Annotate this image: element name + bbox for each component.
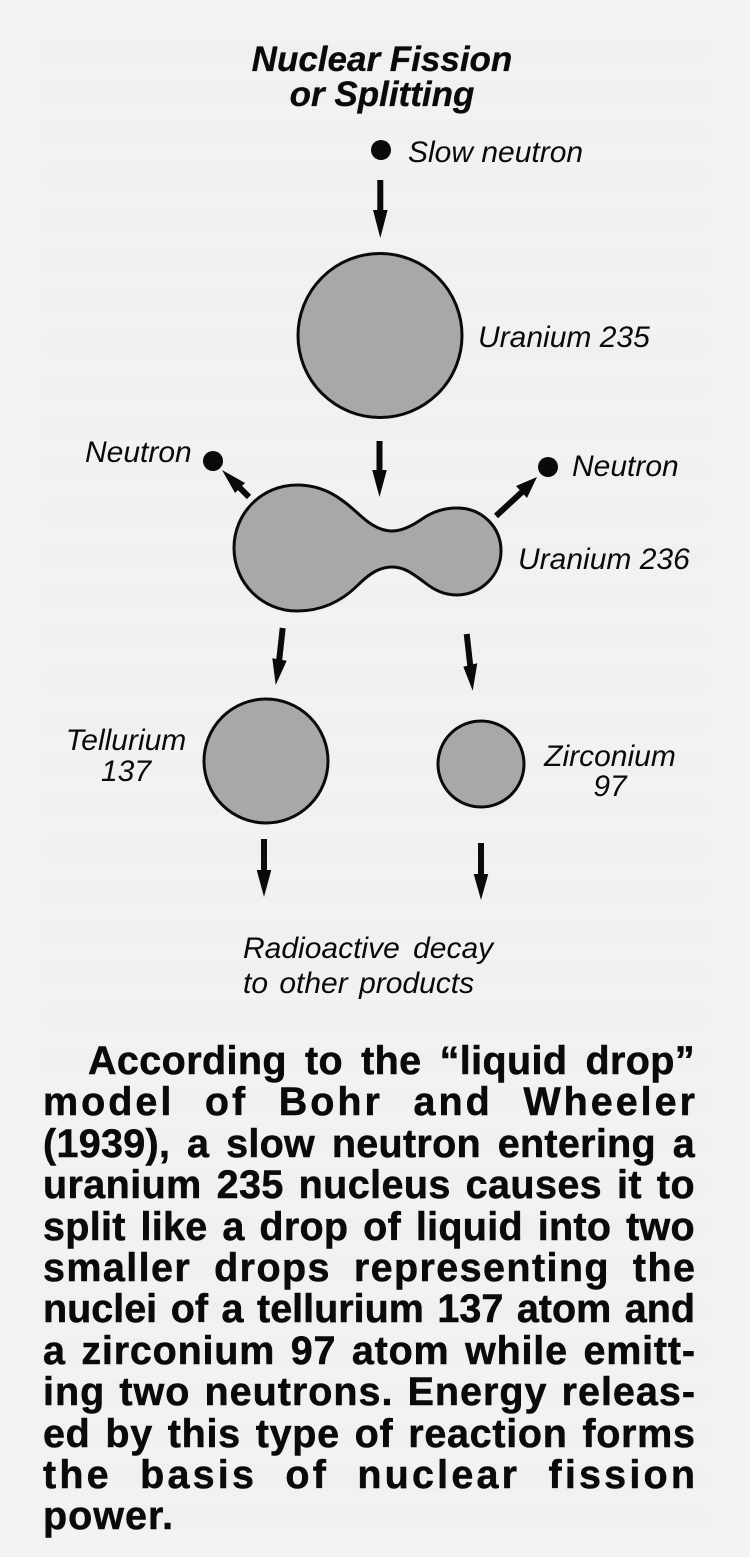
caption text: a zirconium 97 atom while emitt-	[43, 1329, 696, 1373]
arrow: to tellurium	[272, 628, 287, 685]
title	[252, 40, 512, 114]
label: tellurium 137: Tellurium	[66, 724, 186, 757]
caption text: (1939), a slow neutron entering a	[43, 1122, 695, 1166]
title: or Splitting	[290, 75, 474, 114]
caption text: ed by this type of reaction forms	[43, 1412, 696, 1456]
label: left neutron: Neutron	[85, 436, 192, 469]
caption text	[43, 1039, 698, 1538]
label: zirconium 97: 97	[593, 770, 627, 803]
caption text: power.	[43, 1494, 174, 1538]
tellurium 137 nucleus	[204, 699, 328, 823]
caption text: ing two neutrons. Energy releas-	[43, 1370, 696, 1414]
arrow: left neutron	[222, 470, 249, 497]
label: uranium 236: Uranium 236	[518, 543, 690, 576]
diagram: fission	[202, 140, 558, 900]
icon: left neutron	[203, 451, 223, 471]
uranium 236 drop	[234, 485, 501, 611]
caption text: model of Bohr and Wheeler	[43, 1080, 698, 1124]
label: zirconium 97	[544, 740, 676, 803]
arrow: tellurium decay	[257, 839, 271, 897]
zirconium 97 nucleus	[438, 721, 524, 807]
caption text: split like a drop of liquid into two	[43, 1205, 695, 1249]
label: radioactive decay	[243, 932, 495, 1000]
caption text: According to the “liquid drop”	[88, 1039, 695, 1083]
caption text: uranium 235 nucleus causes it to	[43, 1163, 695, 1207]
label: tellurium 137: 137	[101, 755, 151, 788]
label: radioactive decay: to other products	[243, 967, 474, 1000]
title: Nuclear Fission	[252, 40, 512, 79]
arrow: zirconium decay	[474, 843, 488, 900]
arrow: uranium 235 to 236	[372, 441, 387, 497]
caption text: smaller drops representing the	[43, 1246, 696, 1290]
uranium 235 nucleus	[298, 254, 462, 418]
label: tellurium 137	[66, 724, 186, 788]
icon: right neutron	[538, 457, 558, 477]
caption text: nuclei of a tellurium 137 atom and	[43, 1287, 695, 1331]
icon: slow neutron	[371, 140, 391, 160]
arrow: neutron into uranium 235	[373, 180, 388, 238]
label: uranium 235: Uranium 235	[478, 321, 650, 354]
label: slow neutron: Slow neutron	[408, 136, 583, 169]
label: right neutron: Neutron	[572, 450, 679, 483]
label: radioactive decay: Radioactive decay	[243, 932, 493, 965]
arrow: to zirconium	[463, 634, 477, 691]
label: zirconium 97: Zirconium	[544, 740, 676, 773]
caption text: the basis of nuclear fission	[43, 1453, 698, 1497]
arrow: right neutron	[496, 477, 537, 516]
